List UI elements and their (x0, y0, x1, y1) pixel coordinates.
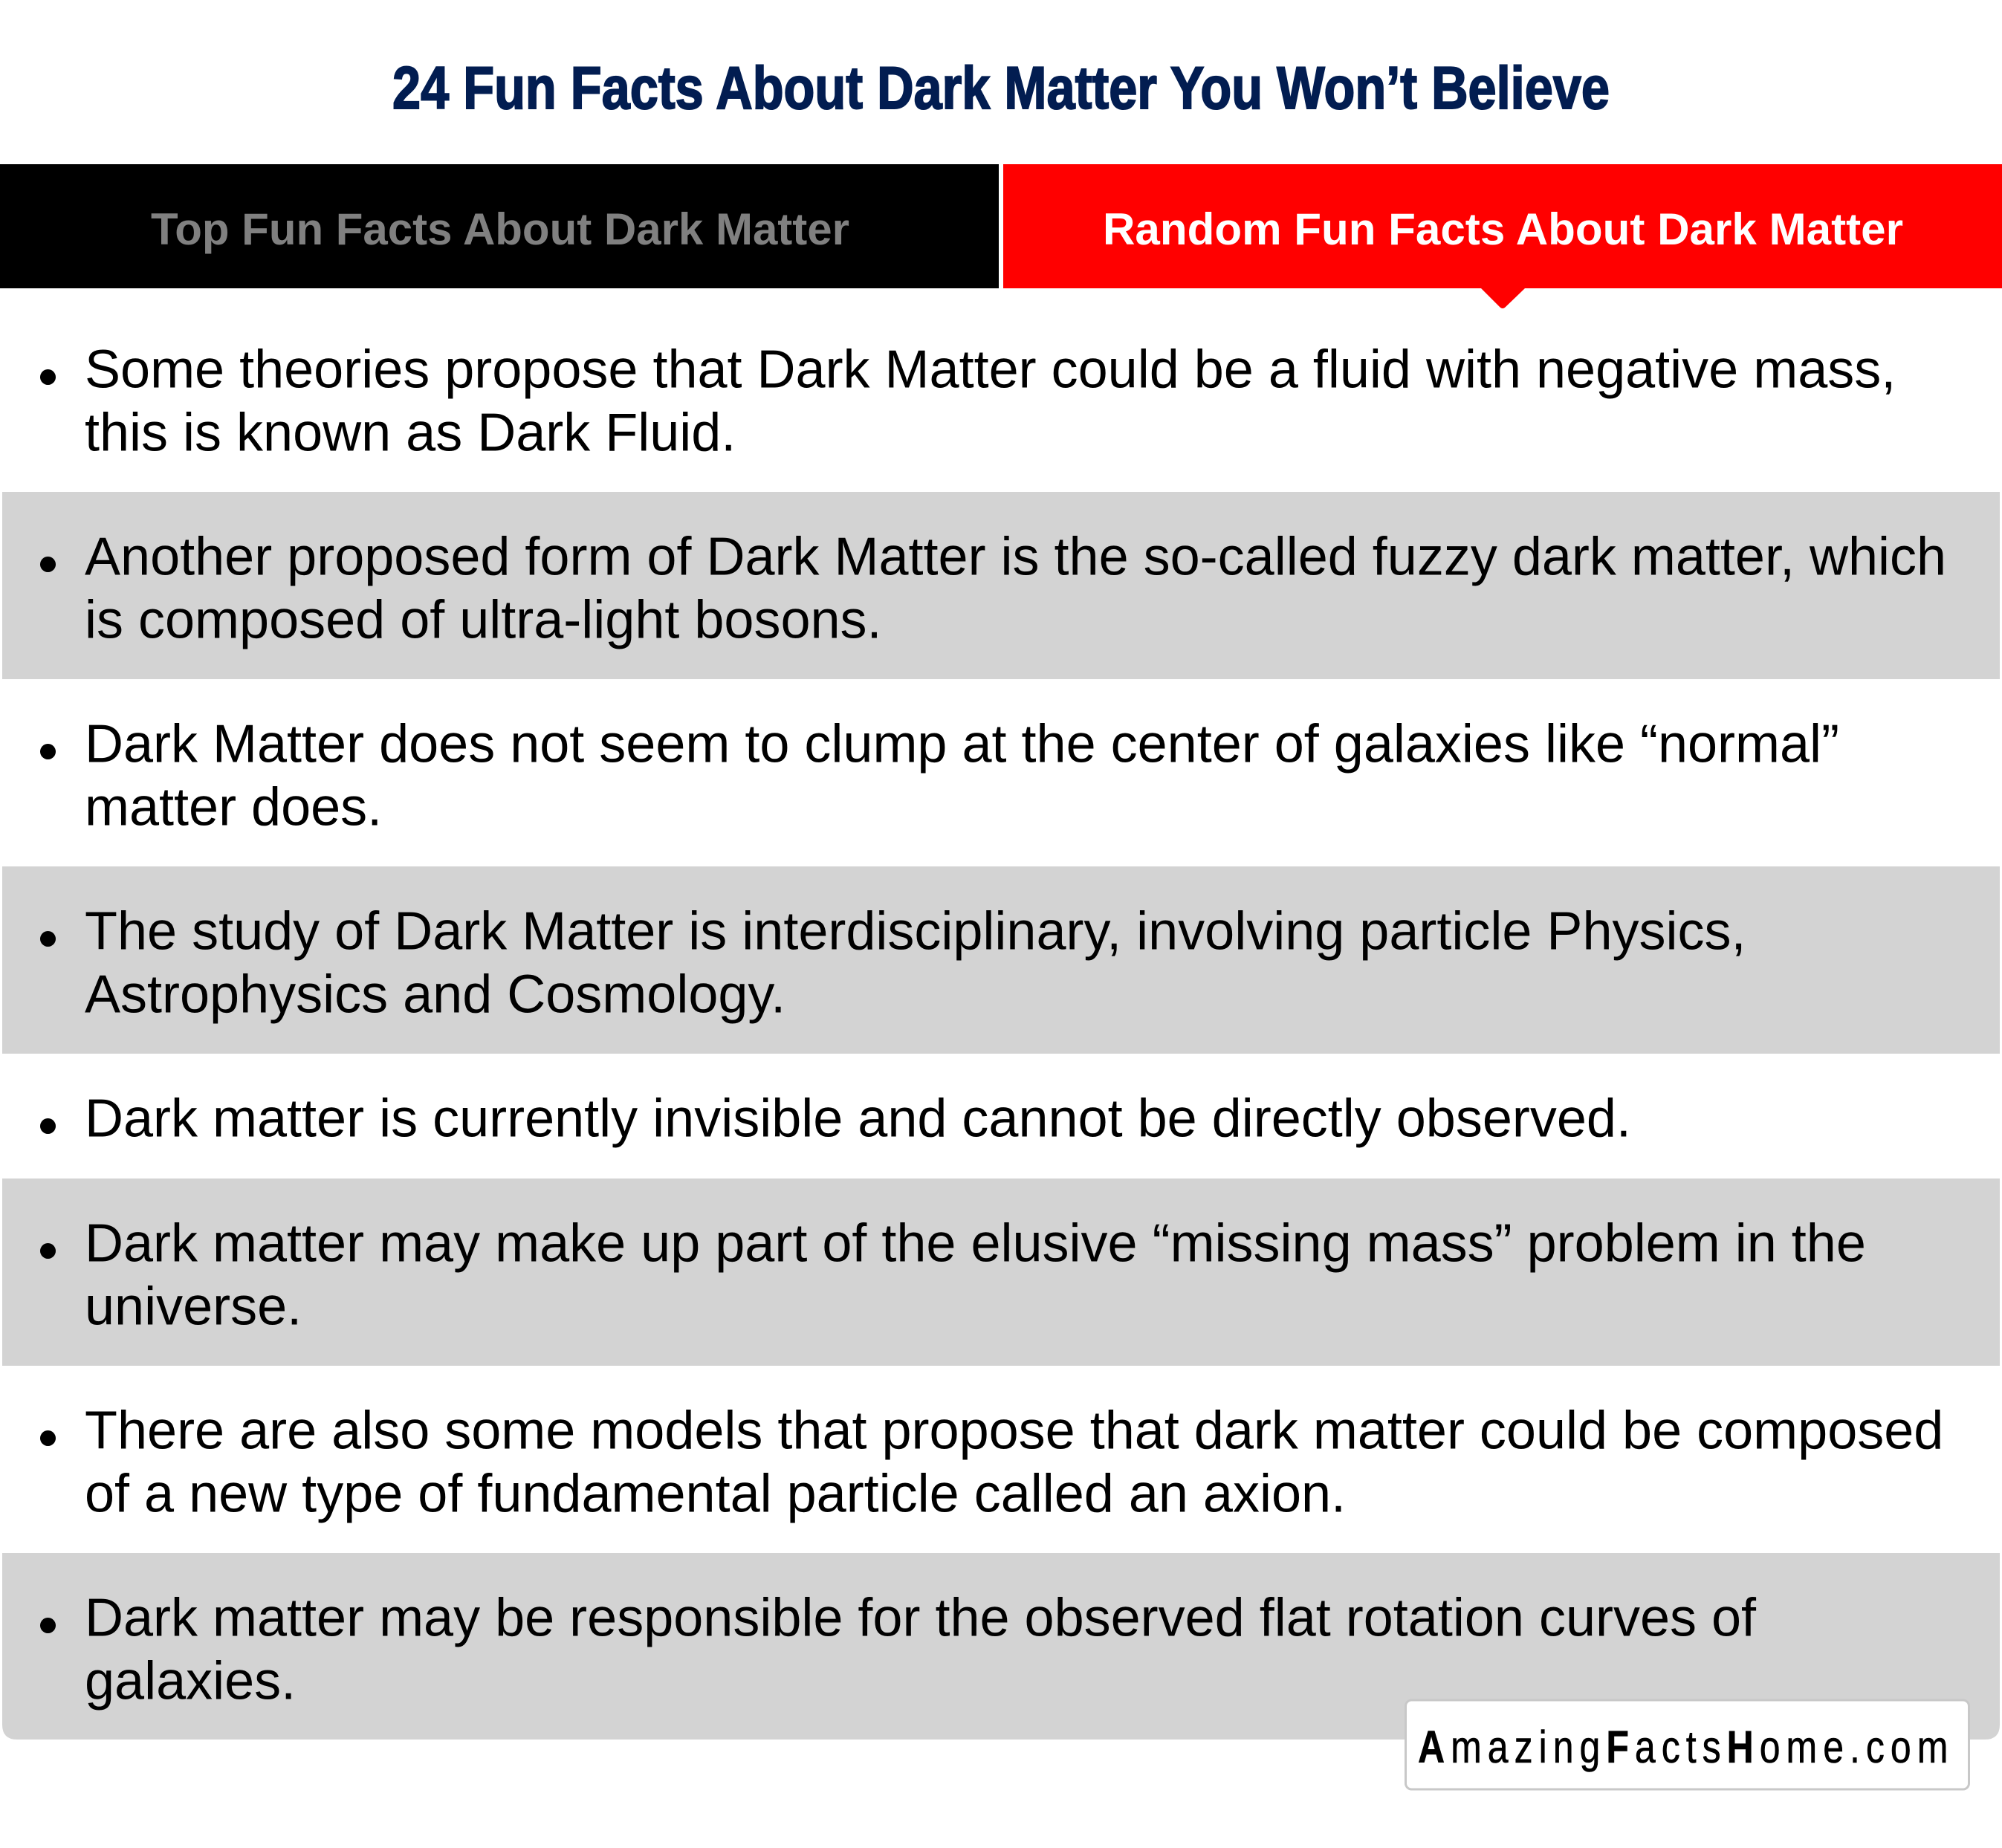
fact 1: this is known as Dark Fluid. (85, 403, 736, 462)
fact 8: galaxies. (85, 1651, 296, 1711)
fact 3 (40, 715, 1839, 837)
tab: random fun facts (active): Random Fun Facts About Dark Matter (1103, 204, 1903, 254)
fact 7: There are also some models that propose that dark matter could be composed (85, 1401, 1943, 1461)
fact 6: Dark matter may make up part of the elusive “missing mass” problem in the (85, 1214, 1866, 1274)
fact 8: Dark matter may be responsible for the observed flat rotation curves of (85, 1589, 1757, 1648)
title: 24 Fun Facts About Dark Matter You Won’t Believe (392, 55, 1610, 122)
watermark: AmazingFactsHome.com: AmazingFactsHome.com (1418, 1722, 1948, 1772)
fact 6 (2, 1178, 2000, 1366)
fact 3: Dark Matter does not seem to clump at the center of galaxies like “normal” (85, 715, 1839, 774)
fact 6: universe. (85, 1277, 302, 1336)
fact 3: matter does. (85, 777, 382, 837)
fact 1 (40, 340, 1896, 462)
fact 4: The study of Dark Matter is interdisciplinary, involving particle Physics, (85, 902, 1746, 962)
fact 2: Another proposed form of Dark Matter is the so-called fuzzy dark matter, which (85, 528, 1946, 587)
tab: top fun facts (0, 164, 999, 288)
fact 4 (2, 866, 2000, 1054)
fact 8 (2, 1553, 2000, 1740)
fact 7 (40, 1401, 1943, 1523)
tab: random fun facts (active) (1003, 164, 2002, 308)
fact 7: of a new type of fundamental particle called an axion. (85, 1464, 1346, 1523)
fact 2: is composed of ultra-light bosons. (85, 590, 882, 649)
fact 5: Dark matter is currently invisible and cannot be directly observed. (85, 1089, 1631, 1149)
fact 1: Some theories propose that Dark Matter could be a fluid with negative mass, (85, 340, 1896, 400)
tab: top fun facts: Top Fun Facts About Dark Matter (151, 204, 849, 254)
fact 4: Astrophysics and Cosmology. (85, 964, 785, 1024)
fact 2 (2, 492, 2000, 679)
watermark: AmazingFactsHome.com (1406, 1700, 1969, 1789)
